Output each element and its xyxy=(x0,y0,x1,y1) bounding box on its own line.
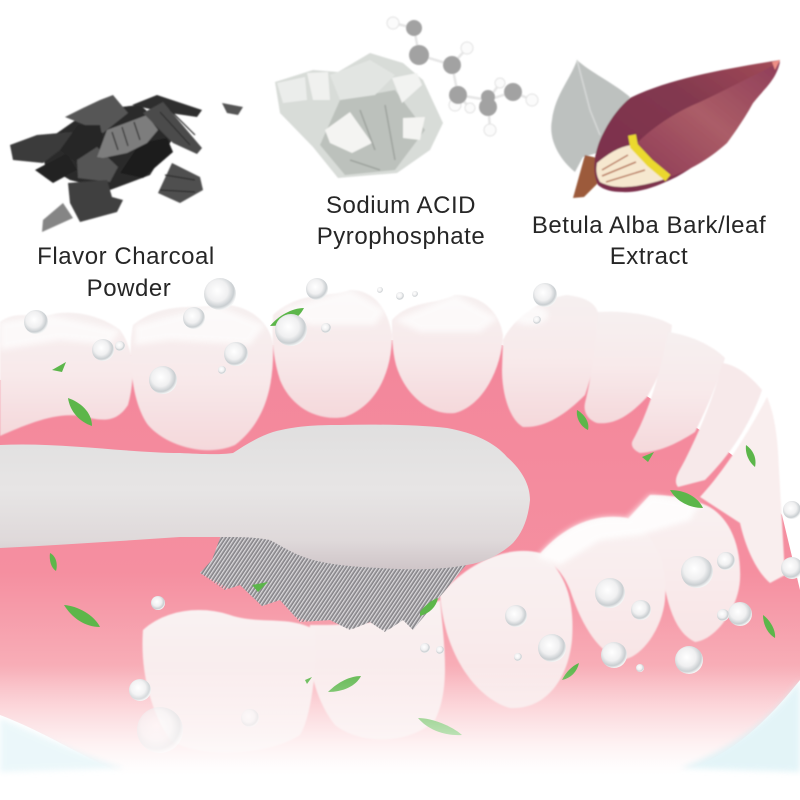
icon: charcoal pile xyxy=(10,95,243,232)
label: charcoal: Flavor Charcoal xyxy=(37,243,215,270)
label: charcoal xyxy=(37,243,215,302)
toothbrush bristles xyxy=(200,537,466,632)
gums xyxy=(0,340,800,778)
label: sodium: Sodium ACID xyxy=(326,192,476,219)
icon: betula leaf and bud xyxy=(551,60,780,198)
foam on upper teeth xyxy=(0,290,548,350)
toothbrush head xyxy=(0,425,530,569)
foam on lower teeth xyxy=(537,495,700,565)
upper teeth xyxy=(0,290,785,583)
leaves xyxy=(50,308,775,735)
label: betula xyxy=(532,212,766,270)
label: betula: Betula Alba Bark/leaf xyxy=(532,212,766,239)
label: charcoal: Powder xyxy=(87,275,171,302)
label: sodium: Pyrophosphate xyxy=(317,223,485,250)
label: betula: Extract xyxy=(610,243,688,270)
label: sodium xyxy=(317,192,485,250)
icon: sodium acid pyrophosphate crystals xyxy=(275,17,538,178)
bubbles xyxy=(24,278,800,753)
lower teeth xyxy=(142,495,740,753)
bottom fade xyxy=(0,665,800,800)
